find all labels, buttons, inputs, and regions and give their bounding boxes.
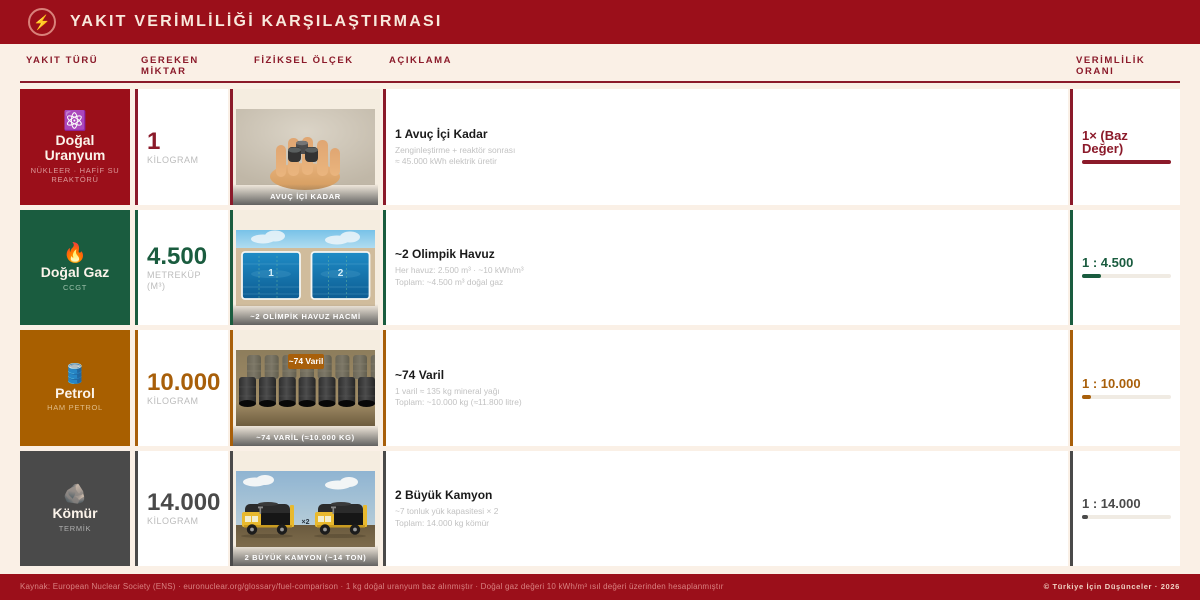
physical scale: trucks xyxy=(230,451,380,566)
fuel card: gas: 🔥 xyxy=(63,243,87,264)
caption xyxy=(233,425,378,446)
description: ~2 Olimpik Havuz xyxy=(395,247,495,261)
fuel card: petroleum: HAM PETROL xyxy=(47,403,103,412)
caption: 2 BÜYÜK KAMYON (~14 TON) xyxy=(245,553,366,562)
quantity: 4500 cubic metres: METREKÜP (M³) xyxy=(147,270,201,290)
quantity: 1 kilogram: KİLOGRAM xyxy=(147,155,199,165)
label: 74 barrels xyxy=(288,354,324,369)
description: 1 varil ≈ 135 kg mineral yağı xyxy=(395,386,500,396)
efficiency ratio: 1 to 4500: 1 : 4.500 xyxy=(1082,255,1133,270)
column heading: fuel type: YAKIT TÜRÜ xyxy=(26,55,98,66)
efficiency ratio: base: Değer) xyxy=(1082,141,1123,156)
caption: AVUÇ İÇİ KADAR xyxy=(270,192,341,201)
quantity: 14000 kilograms: 14.000 xyxy=(147,489,220,516)
fuel card: uranium xyxy=(20,89,130,205)
fuel card: petroleum: Petrol xyxy=(55,385,95,401)
description: 1 Avuç İçi Kadar xyxy=(395,126,487,140)
efficiency ratio: 1 to 14000: 1 : 14.000 xyxy=(1082,496,1141,511)
description xyxy=(383,210,1068,325)
description: ≈ 45.000 kWh elektrik üretir xyxy=(395,156,497,166)
description xyxy=(383,451,1068,566)
fuel card: petroleum: 🛢️ xyxy=(63,364,87,385)
icon: lightning bolt: ⚡ xyxy=(33,14,51,30)
fuel card: coal xyxy=(20,451,130,566)
description: 2 Büyük Kamyon xyxy=(395,488,492,502)
copyright: © Türkiye İçin Düşünceler · 2026 xyxy=(1044,582,1180,591)
illustration: two pools: 2 xyxy=(338,268,344,279)
quantity: 1 kilogram xyxy=(135,89,228,205)
physical scale: olympic pools xyxy=(230,210,380,325)
efficiency ratio: 1 to 10000 xyxy=(1070,330,1180,446)
column heading: required amount: GEREKEN xyxy=(141,55,199,66)
fuel card: coal: 🪨 xyxy=(63,484,87,505)
illustration: two coal trucks: ×2 xyxy=(302,519,310,526)
fuel card: coal: TERMİK xyxy=(59,524,91,533)
illustration: two pools: 1 xyxy=(268,268,274,279)
row: petroleum xyxy=(20,330,1180,446)
fuel card: uranium: Uranyum xyxy=(45,147,105,163)
quantity: 14000 kilograms: KİLOGRAM xyxy=(147,516,199,526)
source note: Kaynak: European Nuclear Society (ENS) · euronuclear.org/glossary/fuel-comparison · 1 kg doğal uranyum baz alınmıştır · Doğal gaz değeri 10 kWh/m³ ısıl değeri üzerinden hesaplanmıştır xyxy=(20,582,724,591)
fuel card: uranium: ⚛️ xyxy=(63,110,87,132)
illustration: barrel rows xyxy=(236,350,375,426)
quantity: 4500 cubic metres xyxy=(135,210,228,325)
description: ~7 tonluk yük kapasitesi × 2 xyxy=(395,506,498,516)
fuel card: gas: Doğal Gaz xyxy=(41,264,109,280)
quantity: 10000 kilograms: KİLOGRAM xyxy=(147,396,199,406)
column heading: efficiency ratio: ORANI xyxy=(1076,66,1114,77)
column heading: physical scale: FİZİKSEL ÖLÇEK xyxy=(254,55,354,66)
caption xyxy=(233,304,378,325)
label: 74 barrels: ~74 Varil xyxy=(289,356,323,366)
quantity: 10000 kilograms xyxy=(135,330,228,446)
quantity: 1 kilogram: 1 xyxy=(147,128,160,155)
physical scale: barrels xyxy=(230,330,380,446)
row: natural uranium xyxy=(20,89,1180,205)
fuel card: uranium: NÜKLEER · HAFİF SU REAKTÖRÜ xyxy=(31,166,119,184)
caption xyxy=(233,184,378,205)
header bar xyxy=(0,0,1200,44)
fuel card: coal: Kömür xyxy=(52,505,98,521)
illustration: pellets in palm xyxy=(236,109,375,190)
fuel card: petroleum xyxy=(20,330,130,446)
physical scale: handful xyxy=(230,89,380,205)
efficiency ratio: base xyxy=(1070,89,1180,205)
row: coal xyxy=(20,451,1180,566)
column heading: required amount xyxy=(141,55,199,77)
description: Toplam: ~10.000 kg (≈11.800 litre) xyxy=(395,397,522,407)
caption: ~2 OLİMPİK HAVUZ HACMİ xyxy=(250,312,361,321)
description: Zenginleştirme + reaktör sonrası xyxy=(395,144,515,154)
description xyxy=(383,330,1068,446)
illustration: two coal trucks xyxy=(236,471,375,547)
description xyxy=(383,89,1068,205)
fuel card: gas: CCGT xyxy=(63,283,87,292)
footer bar xyxy=(0,574,1200,600)
quantity: 10000 kilograms: 10.000 xyxy=(147,369,220,396)
icon: lightning bolt xyxy=(28,8,56,36)
fuel card: uranium: Doğal xyxy=(56,132,94,148)
efficiency ratio: 1 to 4500 xyxy=(1070,210,1180,325)
column heading: description: AÇIKLAMA xyxy=(389,55,452,66)
title: YAKIT VERİMLİLİĞİ KARŞILAŞTIRMASI xyxy=(70,13,443,30)
quantity: 4500 cubic metres: 4.500 xyxy=(147,243,207,270)
description: Her havuz: 2.500 m³ · ~10 kWh/m³ xyxy=(395,265,524,275)
column heading: required amount: MİKTAR xyxy=(141,66,187,77)
fuel card: gas xyxy=(20,210,130,325)
description: Toplam: ~4.500 m³ doğal gaz xyxy=(395,276,503,286)
quantity: 14000 kilograms xyxy=(135,451,228,566)
illustration: two pools xyxy=(236,230,375,306)
column heading: efficiency ratio xyxy=(1076,55,1145,77)
description: ~74 Varil xyxy=(395,368,444,382)
caption xyxy=(233,545,378,566)
efficiency ratio: base: 1× (Baz xyxy=(1082,128,1128,143)
row: natural gas xyxy=(20,210,1180,325)
efficiency ratio: 1 to 10000: 1 : 10.000 xyxy=(1082,376,1141,390)
column heading: efficiency ratio: VERİMLİLİK xyxy=(1076,55,1145,66)
caption: ~74 VARİL (≈10.000 KG) xyxy=(256,433,355,442)
description: Toplam: 14.000 kg kömür xyxy=(395,518,489,528)
efficiency ratio: 1 to 14000 xyxy=(1070,451,1180,566)
